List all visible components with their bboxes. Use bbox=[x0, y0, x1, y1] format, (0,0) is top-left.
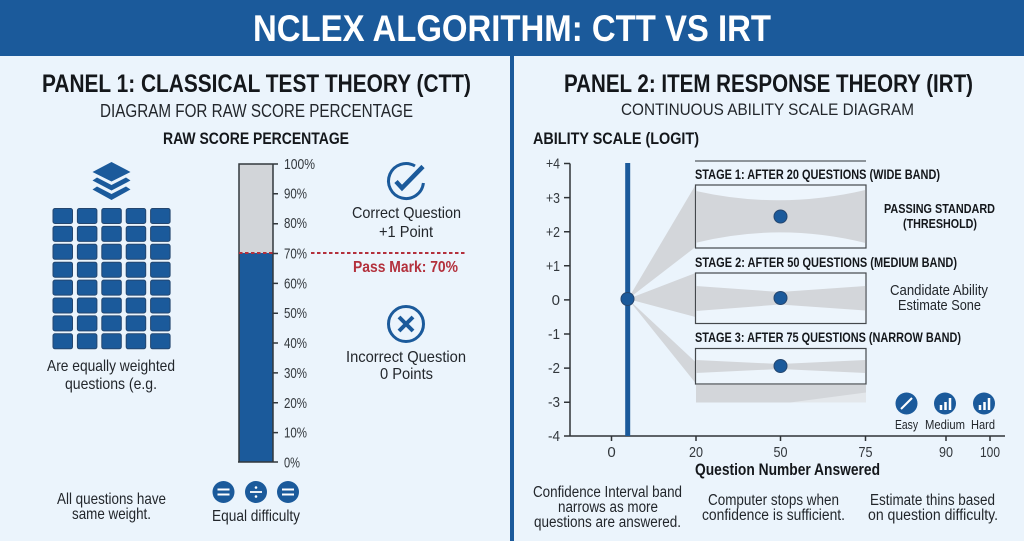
y axis labels bbox=[546, 156, 560, 445]
percent axis labels: 100% bbox=[284, 156, 315, 173]
percent axis labels: 60% bbox=[284, 276, 307, 292]
confidence note: Confidence Interval band bbox=[533, 484, 682, 501]
percent axis labels: 50% bbox=[284, 305, 307, 322]
percent axis labels: 70% bbox=[284, 246, 307, 262]
difficulty note: Estimate thins based bbox=[870, 492, 995, 509]
grid caption: questions (e.g. bbox=[65, 376, 157, 393]
y axis labels: +1 bbox=[546, 258, 560, 275]
panel 2: item response theory bbox=[533, 70, 1005, 531]
percent axis labels: 40% bbox=[284, 335, 307, 352]
same weight note: All questions have bbox=[57, 491, 166, 508]
ability estimate label bbox=[890, 282, 988, 314]
y axis labels: +4 bbox=[546, 156, 560, 172]
confidence note: questions are answered. bbox=[534, 514, 681, 531]
incorrect label bbox=[346, 349, 466, 383]
x axis title: Question Number Answered bbox=[695, 460, 880, 479]
correct label bbox=[352, 205, 461, 241]
same weight note: same weight. bbox=[72, 506, 151, 523]
bar chart heading: RAW SCORE PERCENTAGE bbox=[163, 129, 349, 148]
incorrect label: 0 Points bbox=[380, 366, 433, 383]
stage 2 label: STAGE 2: AFTER 50 QUESTIONS (MEDIUM BAND) bbox=[695, 255, 957, 270]
percent axis labels: 30% bbox=[284, 365, 307, 382]
stopping note: Computer stops when bbox=[708, 492, 839, 509]
stage 2 band bbox=[696, 273, 866, 324]
incorrect label: Incorrect Question bbox=[346, 349, 466, 366]
stage 3 label: STAGE 3: AFTER 75 QUESTIONS (NARROW BAND) bbox=[695, 330, 961, 345]
difficulty labels: Easy bbox=[895, 417, 918, 432]
current estimate dot bbox=[621, 292, 634, 306]
lower grey band bbox=[696, 384, 866, 402]
percent axis labels: 80% bbox=[284, 215, 307, 232]
stage rule bbox=[695, 160, 866, 162]
icons: difficulty levels bbox=[896, 392, 995, 414]
x axis labels: 50 bbox=[774, 444, 788, 461]
ability estimate label: Candidate Ability bbox=[890, 282, 988, 299]
difficulty labels bbox=[895, 417, 995, 432]
y axis labels: 0 bbox=[552, 292, 560, 309]
x axis labels: 0 bbox=[607, 444, 616, 461]
percent axis labels: 0% bbox=[284, 454, 300, 472]
same weight note bbox=[57, 491, 166, 523]
panel 1: classical test theory bbox=[42, 70, 471, 525]
x axis labels: 75 bbox=[858, 444, 872, 461]
pass mark line bbox=[239, 252, 466, 254]
y axis labels: +2 bbox=[546, 224, 560, 241]
pass mark label: Pass Mark: 70% bbox=[353, 259, 458, 276]
percent axis labels: 90% bbox=[284, 186, 307, 202]
y axis labels: -3 bbox=[548, 394, 560, 411]
icons: equal difficulty bbox=[212, 481, 299, 503]
threshold label: (THRESHOLD) bbox=[903, 216, 977, 231]
y axis title: ABILITY SCALE (LOGIT) bbox=[533, 129, 699, 148]
ability line bbox=[625, 163, 630, 436]
confidence note: narrows as more bbox=[558, 499, 658, 516]
y axis labels: -2 bbox=[548, 360, 560, 377]
threshold label: PASSING STANDARD bbox=[884, 201, 995, 216]
question grid bbox=[53, 208, 170, 349]
x axis labels: 100 bbox=[980, 444, 1000, 461]
x axis labels: 20 bbox=[689, 444, 703, 461]
threshold label bbox=[884, 201, 995, 231]
stage 1 band bbox=[696, 185, 866, 248]
difficulty note: on question difficulty. bbox=[868, 507, 998, 524]
icon: correct check bbox=[389, 164, 423, 199]
title banner: NCLEX ALGORITHM: CTT VS IRT bbox=[253, 8, 771, 49]
correct label: +1 Point bbox=[379, 224, 434, 241]
equal difficulty label: Equal difficulty bbox=[212, 508, 300, 525]
grid caption: Are equally weighted bbox=[47, 358, 175, 375]
y axis labels: -1 bbox=[548, 326, 560, 343]
difficulty labels: Hard bbox=[971, 417, 995, 432]
stopping note bbox=[702, 492, 845, 524]
icon: question stack bbox=[92, 162, 130, 200]
icon: incorrect cross bbox=[388, 306, 424, 342]
raw score bar bbox=[238, 164, 278, 462]
difficulty labels: Medium bbox=[925, 417, 965, 432]
panel 2 subtitle: CONTINUOUS ABILITY SCALE DIAGRAM bbox=[621, 100, 914, 119]
x axis labels: 90 bbox=[939, 444, 953, 461]
y axis labels: +3 bbox=[546, 190, 560, 207]
ability axes bbox=[564, 164, 1005, 441]
ability estimate label: Estimate Sone bbox=[898, 297, 981, 314]
grid caption bbox=[47, 358, 175, 393]
percent axis labels: 10% bbox=[284, 424, 307, 442]
y axis labels: -4 bbox=[548, 428, 560, 445]
panel 1 subtitle: DIAGRAM FOR RAW SCORE PERCENTAGE bbox=[100, 101, 413, 121]
difficulty note bbox=[868, 492, 998, 524]
title banner bbox=[0, 0, 1024, 56]
percent axis labels: 20% bbox=[284, 395, 307, 412]
percent axis labels bbox=[284, 156, 315, 472]
stage 3 band bbox=[696, 348, 866, 384]
confidence band fans bbox=[628, 185, 696, 383]
stopping note: confidence is sufficient. bbox=[702, 507, 845, 524]
x axis labels bbox=[607, 444, 1000, 461]
stage 1 label: STAGE 1: AFTER 20 QUESTIONS (WIDE BAND) bbox=[695, 167, 940, 182]
panel 1 heading: PANEL 1: CLASSICAL TEST THEORY (CTT) bbox=[42, 70, 471, 98]
correct label: Correct Question bbox=[352, 205, 461, 222]
confidence note bbox=[533, 484, 682, 531]
